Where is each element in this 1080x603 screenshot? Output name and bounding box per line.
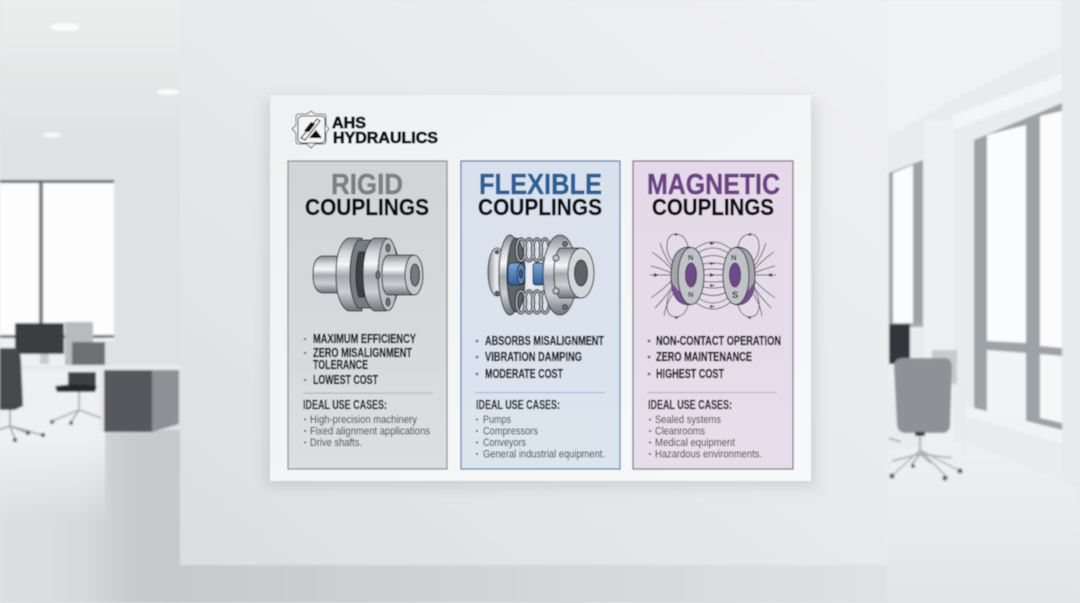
pole labels: N <box>688 253 693 262</box>
panel: magnetic couplings <box>633 161 793 469</box>
use cases: Pumps <box>483 414 511 426</box>
key features list: ZERO MISALIGNMENT <box>313 345 412 360</box>
heading: COUPLINGS: COUPLINGS <box>478 194 602 220</box>
heading: FLEXIBLE: FLEXIBLE <box>479 169 602 201</box>
logo: AHS Hydraulics <box>292 111 438 148</box>
logo text: AHS: AHS <box>332 115 366 132</box>
key features list: MAXIMUM EFFICIENCY <box>313 331 416 346</box>
heading: COUPLINGS: COUPLINGS <box>652 194 774 220</box>
use cases: Sealed systems <box>655 414 721 426</box>
panel: rigid couplings <box>288 161 447 469</box>
use cases: Conveyors <box>483 437 526 449</box>
heading: MAGNETIC: MAGNETIC <box>647 169 780 201</box>
use cases: Fixed alignment applications <box>310 426 430 438</box>
key features list: LOWEST COST <box>313 372 378 387</box>
use cases: Hazardous environments. <box>655 448 762 460</box>
icon: rigid coupling <box>313 238 423 311</box>
key features list: ABSORBS MISALIGNMENT <box>485 333 604 348</box>
poster board <box>270 95 811 481</box>
key features list <box>304 331 416 387</box>
heading: RIGID: RIGID <box>331 169 403 201</box>
heading: COUPLINGS: COUPLINGS <box>305 194 429 220</box>
pole labels: S <box>732 290 738 301</box>
icon: magnetic field coupling <box>650 233 776 319</box>
key features list: TOLERANCE <box>313 357 368 372</box>
use cases: Cleanrooms <box>655 426 705 438</box>
pole labels: N <box>731 253 736 262</box>
use cases: Compressors <box>483 426 538 438</box>
icon: flexible coupling <box>488 235 594 315</box>
poster shadow <box>266 100 815 486</box>
key features list: HIGHEST COST <box>656 366 724 381</box>
use cases: IDEAL USE CASES: <box>303 397 387 412</box>
key features list: ZERO MAINTENANCE <box>656 349 752 364</box>
use cases <box>303 397 430 449</box>
key features list <box>648 333 781 381</box>
key features list <box>476 333 604 381</box>
use cases: Medical equipment <box>655 437 735 449</box>
use cases: General industrial equipment. <box>483 448 605 460</box>
key features list: VIBRATION DAMPING <box>485 349 582 364</box>
key features list: MODERATE COST <box>485 366 563 381</box>
use cases <box>476 397 605 460</box>
icon: logo badge <box>292 111 329 148</box>
pole labels: N <box>688 290 693 299</box>
use cases: IDEAL USE CASES: <box>648 397 732 412</box>
use cases <box>648 397 762 460</box>
logo text: HYDRAULICS: HYDRAULICS <box>333 130 438 147</box>
key features list: NON-CONTACT OPERATION <box>656 333 781 348</box>
pole labels <box>688 253 738 301</box>
use cases: High-precision machinery <box>310 414 417 426</box>
panel: flexible couplings <box>461 161 620 469</box>
use cases: IDEAL USE CASES: <box>476 397 560 412</box>
use cases: Drive shafts. <box>310 437 362 449</box>
